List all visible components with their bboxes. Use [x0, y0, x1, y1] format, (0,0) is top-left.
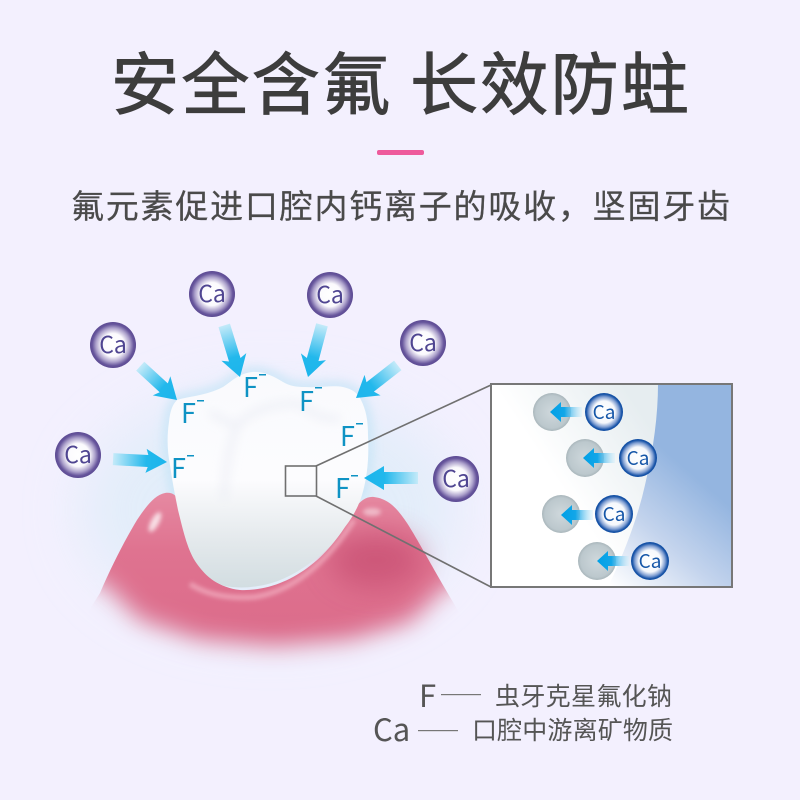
F label 3	[299, 380, 322, 419]
Ca ion 6	[433, 456, 479, 502]
F label 2: F	[243, 366, 258, 405]
zoom callout lines and marker square	[286, 385, 491, 587]
gum	[95, 492, 454, 663]
subtitle: 氟元素促进口腔内钙离子的吸收，坚固牙齿	[71, 180, 730, 228]
legend row: Ca: Ca	[373, 705, 410, 750]
F label 3: F	[299, 380, 314, 419]
Ca ion 5: Ca	[64, 436, 92, 470]
Ca ion 1	[189, 271, 235, 317]
arrow: left upper	[131, 357, 186, 410]
tooth cusp shading	[210, 404, 340, 500]
F label 5: F	[171, 447, 186, 486]
Ca ion 5	[55, 432, 101, 478]
F label 4: F	[340, 415, 355, 454]
gum highlight right	[363, 508, 381, 516]
arrow: right lower	[364, 466, 418, 490]
Ca ion 4	[400, 320, 446, 366]
title: 安全含氟 长效防蛀	[111, 30, 689, 129]
arrow: left lower	[112, 447, 168, 474]
F label 6: F	[335, 467, 350, 506]
inset row 3	[542, 495, 633, 533]
tooth and gum illustration	[84, 362, 456, 663]
calcium ions around tooth	[55, 271, 479, 502]
soft halo behind tooth	[80, 390, 460, 630]
F label 5	[171, 447, 194, 486]
arrow: right upper	[348, 355, 406, 408]
Ca ion 1: Ca	[198, 275, 226, 309]
legend row: Ca	[373, 705, 673, 750]
inset row 3: Ca	[603, 500, 625, 527]
gum shadow	[330, 532, 422, 588]
tooth	[168, 372, 368, 588]
tooth glow	[168, 372, 368, 495]
Ca ion 2: Ca	[316, 276, 344, 310]
Ca ion 6: Ca	[442, 460, 470, 494]
legend row: F	[419, 671, 672, 716]
Ca ion 4: Ca	[409, 324, 437, 358]
inset panel: enamel close-up	[491, 384, 732, 587]
Ca ion 3: Ca	[99, 326, 127, 360]
inset row 2: Ca	[627, 444, 649, 471]
inset row 4: Ca	[639, 547, 661, 574]
gum rim highlight	[190, 520, 354, 597]
F label 4	[340, 415, 363, 454]
F label 6	[335, 467, 358, 506]
inset enamel	[491, 384, 732, 587]
legend row: F: 虫牙克星氟化钠	[495, 677, 672, 713]
inset row 1: Ca	[593, 398, 615, 425]
legend row: Ca: 口腔中游离矿物质	[472, 711, 673, 747]
inset row 4	[578, 542, 669, 580]
fluoride labels	[171, 366, 363, 506]
inset row 2	[566, 439, 657, 477]
arrow: top right	[295, 321, 335, 380]
legend row: F: F	[419, 671, 436, 716]
F label 1: F	[181, 392, 196, 431]
F label 1	[181, 392, 204, 431]
inset row 1	[533, 393, 623, 431]
gum highlight left	[146, 510, 164, 534]
pink divider	[377, 150, 424, 155]
Ca ion 2	[307, 272, 353, 318]
Ca ion 3	[90, 322, 136, 368]
inset blue saliva area	[608, 384, 732, 587]
F label 2	[243, 366, 266, 405]
legend	[373, 671, 673, 750]
inset frame	[491, 384, 732, 587]
arrow: top left	[212, 322, 252, 381]
